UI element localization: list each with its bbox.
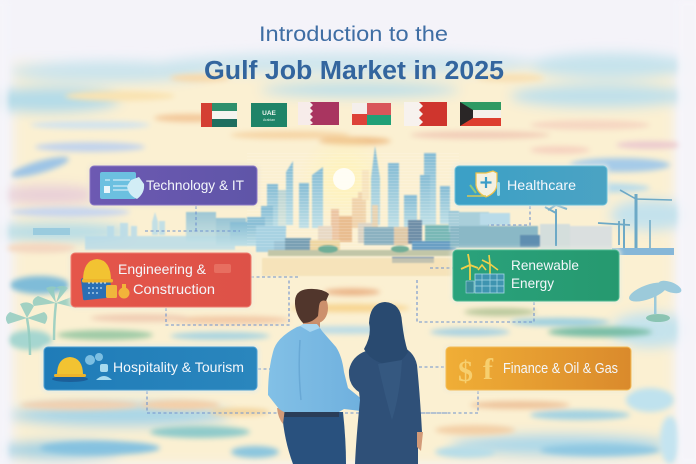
label line 1: Renewable [511, 257, 579, 273]
flag 6: Kuwait [460, 102, 501, 126]
title [204, 22, 504, 85]
panel: Renewable Energy [451, 248, 621, 303]
icon: hard hat and guest symbols [52, 353, 112, 382]
low city blocks [256, 220, 456, 276]
label line 2: Construction [133, 281, 215, 297]
icon: wind turbines and solar panel [461, 254, 504, 293]
figure: man from behind [268, 289, 363, 464]
label: Healthcare [507, 177, 576, 193]
dashed connectors [145, 206, 534, 413]
head [306, 293, 328, 323]
label line 1: Engineering & [118, 261, 207, 277]
faint badge [214, 264, 231, 273]
flag 2: UAE-labelled green flag [251, 103, 287, 127]
figure: woman in hijab and abaya [349, 302, 423, 464]
panel: Technology & IT [88, 164, 259, 207]
title line 1: Introduction to the [259, 22, 448, 46]
icon: hard hat, blueprint and money bag [81, 259, 130, 300]
flag 2: UAE-labelled green flag: UAE [262, 110, 277, 117]
panel: Hospitality & Tourism [42, 345, 259, 392]
icon: currency symbols: f [483, 353, 494, 386]
towers [186, 146, 459, 246]
panel: Engineering & Construction [69, 251, 253, 309]
icon: currency symbols [458, 353, 494, 388]
panel: Finance & Oil & Gas [444, 345, 633, 392]
label line 2: Energy [511, 275, 554, 291]
neck [303, 312, 320, 330]
edge fade [678, 0, 696, 464]
palm trees, right [627, 278, 683, 322]
warm mid towers near sun [331, 170, 378, 243]
cranes [545, 190, 674, 255]
left hand [277, 408, 285, 424]
flag 3: Qatar [298, 102, 339, 125]
flags row [201, 102, 501, 127]
label: Technology & IT [146, 177, 244, 193]
right distant blocks [449, 212, 612, 250]
icon: screen and shield [100, 172, 144, 199]
flag 1: UAE [201, 103, 237, 127]
sign, left [33, 228, 70, 235]
flag 4: Oman [352, 103, 391, 125]
shirt [268, 325, 363, 412]
skyline [33, 133, 674, 276]
icon: shield with cross [467, 171, 500, 197]
flag 5: Bahrain [404, 102, 447, 126]
title line 2: Gulf Job Market in 2025 [204, 57, 504, 85]
label: Hospitality & Tourism [113, 359, 244, 375]
distant left skyline [85, 212, 235, 250]
trousers [282, 412, 346, 464]
window texture [247, 153, 459, 248]
panel: Healthcare [453, 164, 609, 207]
palm trees, left [6, 286, 78, 355]
sun [333, 168, 355, 190]
flag 2: UAE-labelled green flag: Arabian [263, 118, 275, 122]
icon: currency symbols: $ [458, 355, 473, 388]
label: Finance & Oil & Gas [503, 361, 618, 377]
